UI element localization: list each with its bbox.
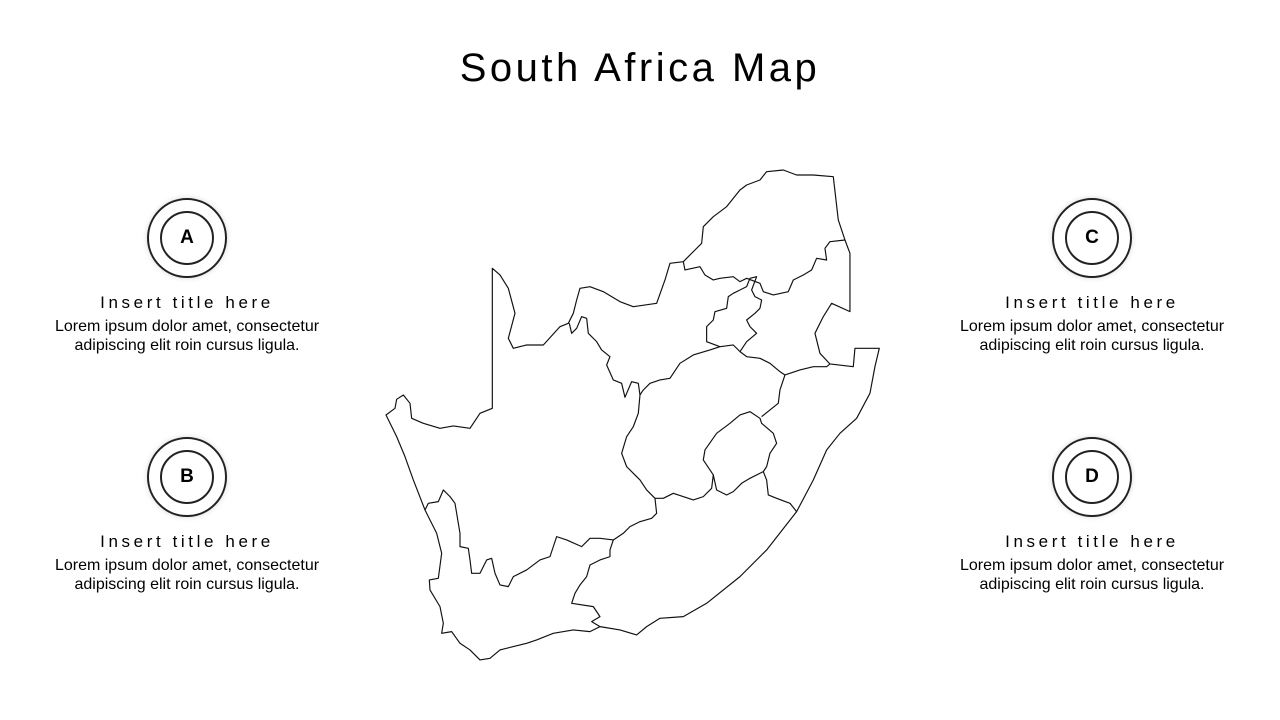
title B: Insert title here (100, 532, 274, 551)
icon: badge A: A (180, 227, 194, 248)
title: South Africa Map (460, 46, 820, 90)
icon: badge D (1050, 435, 1134, 519)
icon: badge D: D (1085, 466, 1099, 487)
body D: Lorem ipsum dolor amet, consectetur (960, 557, 1224, 574)
icon: badge C: C (1085, 227, 1099, 248)
body B: adipiscing elit roin cursus ligula. (74, 576, 300, 593)
title C: Insert title here (1005, 293, 1179, 312)
body C (960, 318, 1224, 354)
body D (960, 557, 1224, 593)
body B: Lorem ipsum dolor amet, consectetur (55, 557, 319, 574)
title D: Insert title here (1005, 532, 1179, 551)
body B (55, 557, 319, 593)
map outline (386, 170, 879, 660)
body D: adipiscing elit roin cursus ligula. (980, 576, 1204, 593)
icon: badge A (145, 196, 229, 280)
item C (960, 196, 1224, 354)
icon: badge C (1050, 196, 1134, 280)
item D (960, 435, 1224, 593)
body A (55, 318, 319, 354)
icon: badge B (145, 435, 229, 519)
title A: Insert title here (100, 293, 274, 312)
body A: Lorem ipsum dolor amet, consectetur (55, 318, 319, 335)
province borders (425, 240, 845, 627)
body C: adipiscing elit roin cursus ligula. (980, 337, 1204, 354)
item B (55, 435, 319, 593)
icon: badge B: B (180, 466, 194, 487)
body A: adipiscing elit roin cursus ligula. (74, 337, 300, 354)
body C: Lorem ipsum dolor amet, consectetur (960, 318, 1224, 335)
item A (55, 196, 319, 354)
